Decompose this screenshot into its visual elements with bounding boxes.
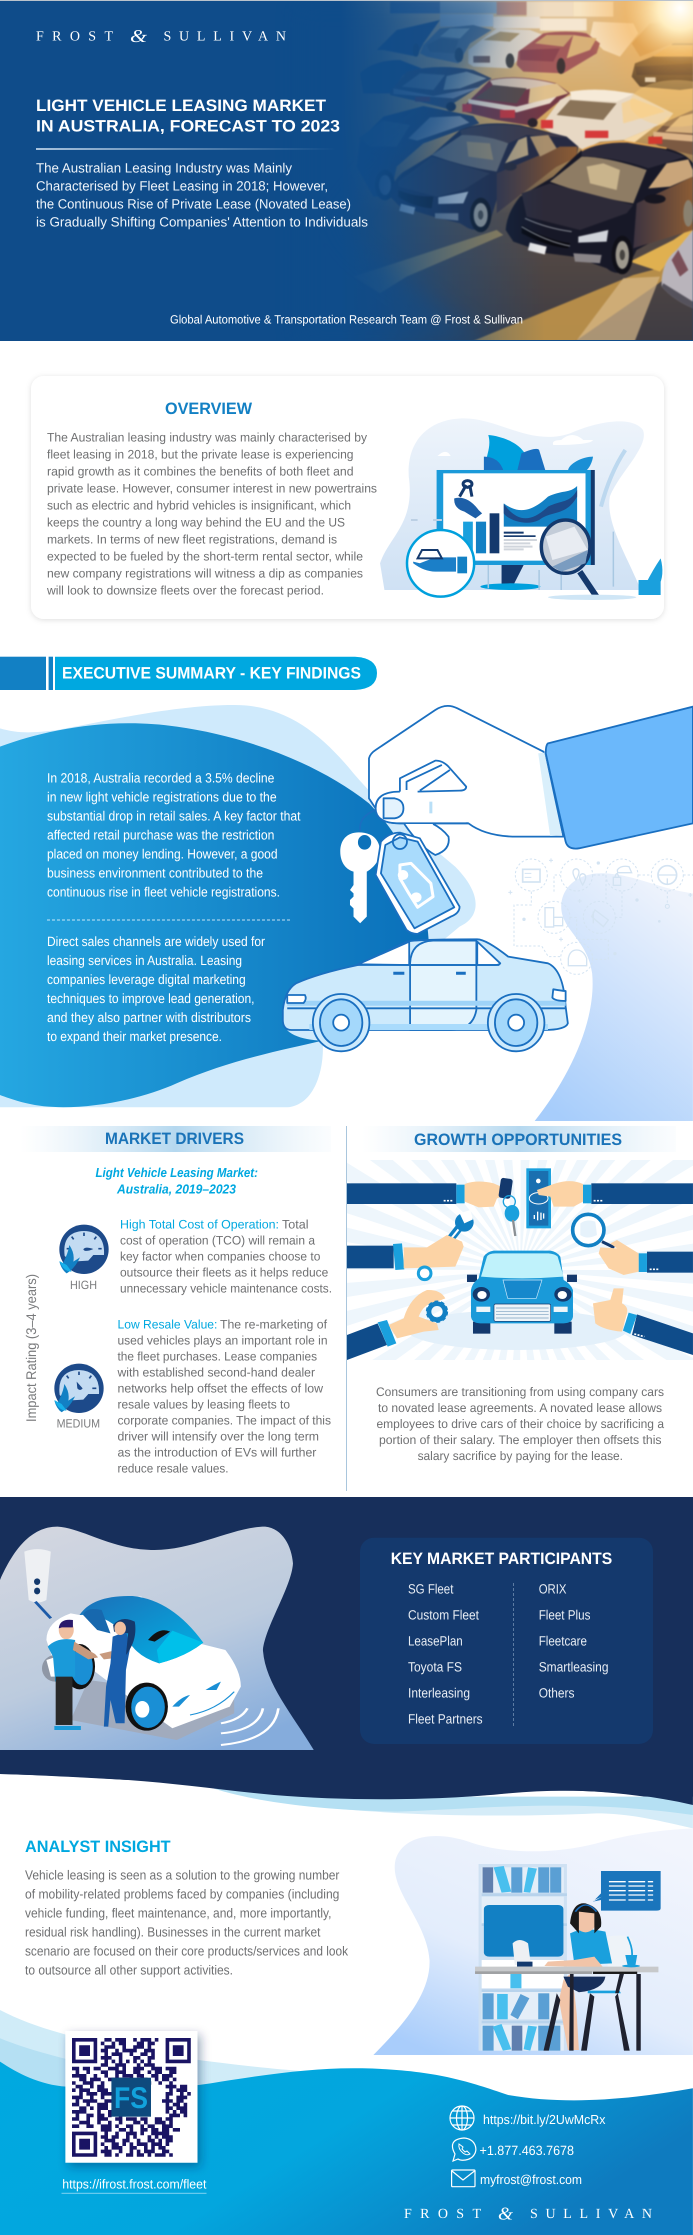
QR code: FS	[114, 2082, 148, 2115]
hand: magnifier	[573, 1214, 693, 1275]
logo: Frost & Sullivan footer: &	[498, 2204, 513, 2224]
subtitle	[36, 161, 368, 230]
contact: website	[450, 2106, 606, 2130]
summary text: affected retail purchase was the restriction	[47, 827, 274, 842]
gauge: medium: MEDIUM	[57, 1417, 100, 1431]
participants list: column one: Interleasing	[408, 1685, 470, 1700]
logo: Frost & Sullivan footer: SULLIVAN	[530, 2207, 652, 2222]
driver text: high total cost of operation: outsource their fleets as it helps reduce	[120, 1266, 328, 1280]
heading: analyst insight: ANALYST INSIGHT	[25, 1838, 171, 1856]
analyst text: scenario are focused on their core products/services and look	[25, 1943, 348, 1958]
illustration: dashboard with magnifier	[380, 418, 662, 600]
logo: Frost & Sullivan: &	[130, 26, 147, 46]
key	[340, 832, 380, 923]
title: LIGHT VEHICLE LEASING MARKET	[36, 97, 326, 115]
link: report url: https://ifrost.frost.com/fleet	[62, 2177, 207, 2192]
contact: phone	[452, 2138, 574, 2161]
top rows	[390, 2, 440, 13]
logo: Frost & Sullivan: SULLIVAN	[164, 30, 286, 45]
driver text: low resale value: the fleet purchases. Lease companies	[118, 1349, 317, 1363]
panel: growth opportunities	[347, 1126, 693, 1463]
analyst text: residual risk handling). Businesses in the current market	[25, 1924, 321, 1939]
chart subtitle: Light Vehicle Leasing Market:	[96, 1165, 258, 1180]
driver text: low resale value: used vehicles plays an important role in	[118, 1333, 328, 1347]
growth text: employees to drive cars of their choice by sacrificing a	[376, 1417, 664, 1431]
participants list: column one	[408, 1581, 483, 1726]
gauge: medium	[54, 1364, 104, 1431]
subtitle: The Australian Leasing Industry was Mainly	[36, 161, 292, 176]
summary text: leasing services in Australia. Leasing	[47, 953, 242, 968]
top wave layers	[0, 1770, 693, 1828]
logo: Frost & Sullivan: FROST	[36, 30, 113, 45]
summary text: continuous rise in fleet vehicle registrations.	[47, 884, 280, 899]
icon network	[508, 858, 693, 974]
illustration: call-centre agent at desk	[373, 1828, 693, 2055]
row three	[360, 60, 422, 93]
panel: footer	[0, 2010, 693, 2235]
driver text: low resale value	[117, 1317, 331, 1475]
overview text	[46, 431, 377, 598]
hand: thumbs up	[593, 1288, 693, 1355]
driver text: low resale value: as the introduction of EVs will further	[118, 1445, 316, 1459]
subtitle: Characterised by Fleet Leasing in 2018; However,	[36, 179, 328, 194]
car	[283, 939, 568, 1051]
heading: market drivers	[20, 1126, 331, 1152]
growth text: to novated lease agreements. A novated lease allows	[378, 1401, 662, 1415]
participants list: column two: Fleetcare	[539, 1633, 587, 1648]
illustration: hands working on car	[347, 1160, 693, 1360]
growth text: portion of their salary. The employer then offsets this	[379, 1433, 662, 1447]
subtitle: is Gradually Shifting Companies' Attention to Individuals	[36, 215, 368, 230]
car	[467, 1251, 577, 1334]
photo: parked cars in sunset	[354, 1, 693, 340]
hand: keys	[347, 1178, 519, 1236]
summary text: placed on money lending. However, a good	[47, 846, 278, 861]
overview text: expected to be fueled by the short-term rental sector, while	[47, 550, 363, 564]
driver text: low resale value: networks help offset the effects of low	[118, 1381, 323, 1395]
heading: key market participants: KEY MARKET PARTICIPANTS	[391, 1550, 612, 1568]
driver text: high total cost of operation: key factor when companies choose to	[120, 1250, 320, 1264]
growth text: Consumers are transitioning from using company cars	[376, 1385, 664, 1399]
driver text: low resale value: corporate companies. The impact of this	[118, 1413, 331, 1427]
overview text: fleet leasing in 2018, but the private lease is experiencing	[47, 448, 354, 462]
participants list: column one: LeasePlan	[408, 1633, 463, 1648]
summary text: techniques to improve lead generation,	[47, 991, 254, 1006]
driver text: low resale value: resale values by leasing fleets to	[118, 1397, 290, 1411]
driver text: low resale value: driver will intensify over the long term	[118, 1429, 319, 1443]
heading: growth opportunities: GROWTH OPPORTUNITIES	[414, 1131, 622, 1149]
driver text: high total cost of operation: cost of operation (TCO) will remain a	[120, 1234, 315, 1248]
illustration: handshake beside electric car	[0, 1527, 314, 1750]
panel: executive summary	[0, 705, 693, 1121]
hand: gear	[347, 1290, 447, 1360]
hand	[369, 706, 693, 855]
summary text: companies leverage digital marketing	[47, 972, 246, 987]
participants list: column two: Fleet Plus	[539, 1607, 591, 1622]
participants card	[360, 1538, 653, 1744]
growth text	[376, 1385, 664, 1463]
logo: Frost & Sullivan footer	[404, 2204, 652, 2224]
driver text: low resale value: reduce resale values.	[118, 1461, 228, 1475]
participants list: column one: Toyota FS	[408, 1659, 462, 1674]
participants list: column two: Others	[539, 1685, 575, 1700]
participants list: column two	[539, 1581, 608, 1700]
overview text: The Australian leasing industry was mainly characterised by	[47, 431, 368, 445]
overview text: such as electric and hybrid vehicles is insignificant, which	[47, 499, 351, 513]
contact: email: myfrost@frost.com	[480, 2172, 582, 2187]
row two	[413, 25, 492, 63]
gauge: high	[59, 1225, 109, 1292]
participants list: column two: Smartleasing	[539, 1659, 608, 1674]
panel: market drivers	[20, 1126, 332, 1475]
overview text: rapid growth as it combines the benefits of both fleet and	[47, 465, 354, 479]
driver text: high total cost of operation: Total	[282, 1218, 308, 1232]
subtitle: the Continuous Rise of Private Lease (Novated Lease)	[36, 197, 351, 212]
logo: Frost & Sullivan footer: FROST	[404, 2207, 481, 2222]
heading bar: executive summary: EXECUTIVE SUMMARY - KEY FINDINGS	[62, 664, 361, 682]
heading: overview: OVERVIEW	[165, 400, 252, 418]
driver text: high total cost of operation	[120, 1218, 332, 1296]
summary text	[47, 770, 301, 1044]
heading: market drivers: MARKET DRIVERS	[105, 1130, 244, 1148]
summary text: and they also partner with distributors	[47, 1010, 251, 1025]
panel: analyst insight	[0, 1770, 693, 2055]
car C far-left dark	[370, 106, 480, 200]
logo: Frost & Sullivan	[36, 26, 286, 46]
hand: banknote	[537, 1181, 693, 1207]
title: IN AUSTRALIA, FORECAST TO 2023	[36, 118, 340, 136]
overview text: keeps the country a long way behind the EU and the US	[47, 516, 345, 530]
driver text: low resale value: Low Resale Value:	[118, 1317, 217, 1331]
contact: phone: +1.877.463.7678	[480, 2143, 574, 2158]
overview text: markets. In terms of new fleet registrations, demand is	[47, 533, 337, 547]
footer waves	[0, 2010, 693, 2235]
growth text: salary sacrifice by paying for the lease.	[418, 1449, 623, 1463]
chart subtitle	[96, 1165, 258, 1196]
title	[36, 97, 340, 136]
background blobs	[0, 705, 693, 1121]
credit line: Global Automotive & Transportation Research Team @ Frost & Sullivan	[170, 312, 523, 326]
contact: email	[452, 2170, 582, 2187]
heading: growth opportunities	[362, 1126, 676, 1152]
gauge: high: HIGH	[70, 1278, 97, 1292]
car B	[390, 123, 578, 232]
chart subtitle: Australia, 2019–2023	[116, 1181, 237, 1196]
heading bar: executive summary	[0, 657, 377, 690]
driver text: low resale value: with established second-hand dealer	[117, 1365, 315, 1379]
overview text: private lease. However, consumer interest in new powertrains	[47, 482, 377, 496]
driver text: high total cost of operation: unnecessary vehicle maintenance costs.	[120, 1282, 332, 1296]
panel: header	[0, 0, 693, 345]
banknote	[526, 1168, 551, 1228]
analyst text: to outsource all other support activities.	[25, 1962, 233, 1977]
analyst text: Vehicle leasing is seen as a solution to the growing number	[25, 1867, 340, 1882]
illustration: hand passing keys above car	[283, 706, 693, 1051]
panel: key market participants	[0, 1497, 693, 1805]
silver car	[662, 230, 693, 308]
summary text: to expand their market presence.	[47, 1029, 222, 1044]
summary text: in new light vehicle registrations due to the	[47, 789, 277, 804]
participants list: column one: Fleet Partners	[408, 1711, 483, 1726]
overview text: new company registrations will witness a dip as companies	[47, 567, 363, 581]
tag	[360, 810, 460, 934]
summary text: In 2018, Australia recorded a 3.5% decline	[47, 770, 274, 785]
participants list: column two: ORIX	[539, 1581, 566, 1596]
summary text: substantial drop in retail sales. A key factor that	[47, 808, 301, 823]
hand: wrench	[347, 1210, 474, 1280]
analyst text: vehicle funding, fleet maintenance, and, more importantly,	[25, 1905, 332, 1920]
summary text: business environment contributed to the	[47, 865, 263, 880]
participants list: column one: Custom Fleet	[408, 1607, 479, 1622]
panel: overview	[31, 376, 664, 619]
analyst text	[25, 1867, 348, 1977]
summary text: Direct sales channels are widely used for	[47, 934, 265, 949]
overview text: will look to downsize fleets over the forecast period.	[46, 584, 324, 598]
driver text: low resale value: The re-marketing of	[220, 1317, 328, 1331]
car A	[506, 142, 693, 274]
driver text: high total cost of operation: High Total Cost of Operation:	[120, 1218, 279, 1232]
axis label: Impact Rating (3–4 years)	[23, 1274, 39, 1422]
QR code	[65, 2031, 198, 2163]
participants list: column one: SG Fleet	[408, 1581, 454, 1596]
analyst text: of mobility-related problems faced by companies (including	[25, 1886, 339, 1901]
contact: website: https://bit.ly/2UwMcRx	[483, 2112, 606, 2127]
